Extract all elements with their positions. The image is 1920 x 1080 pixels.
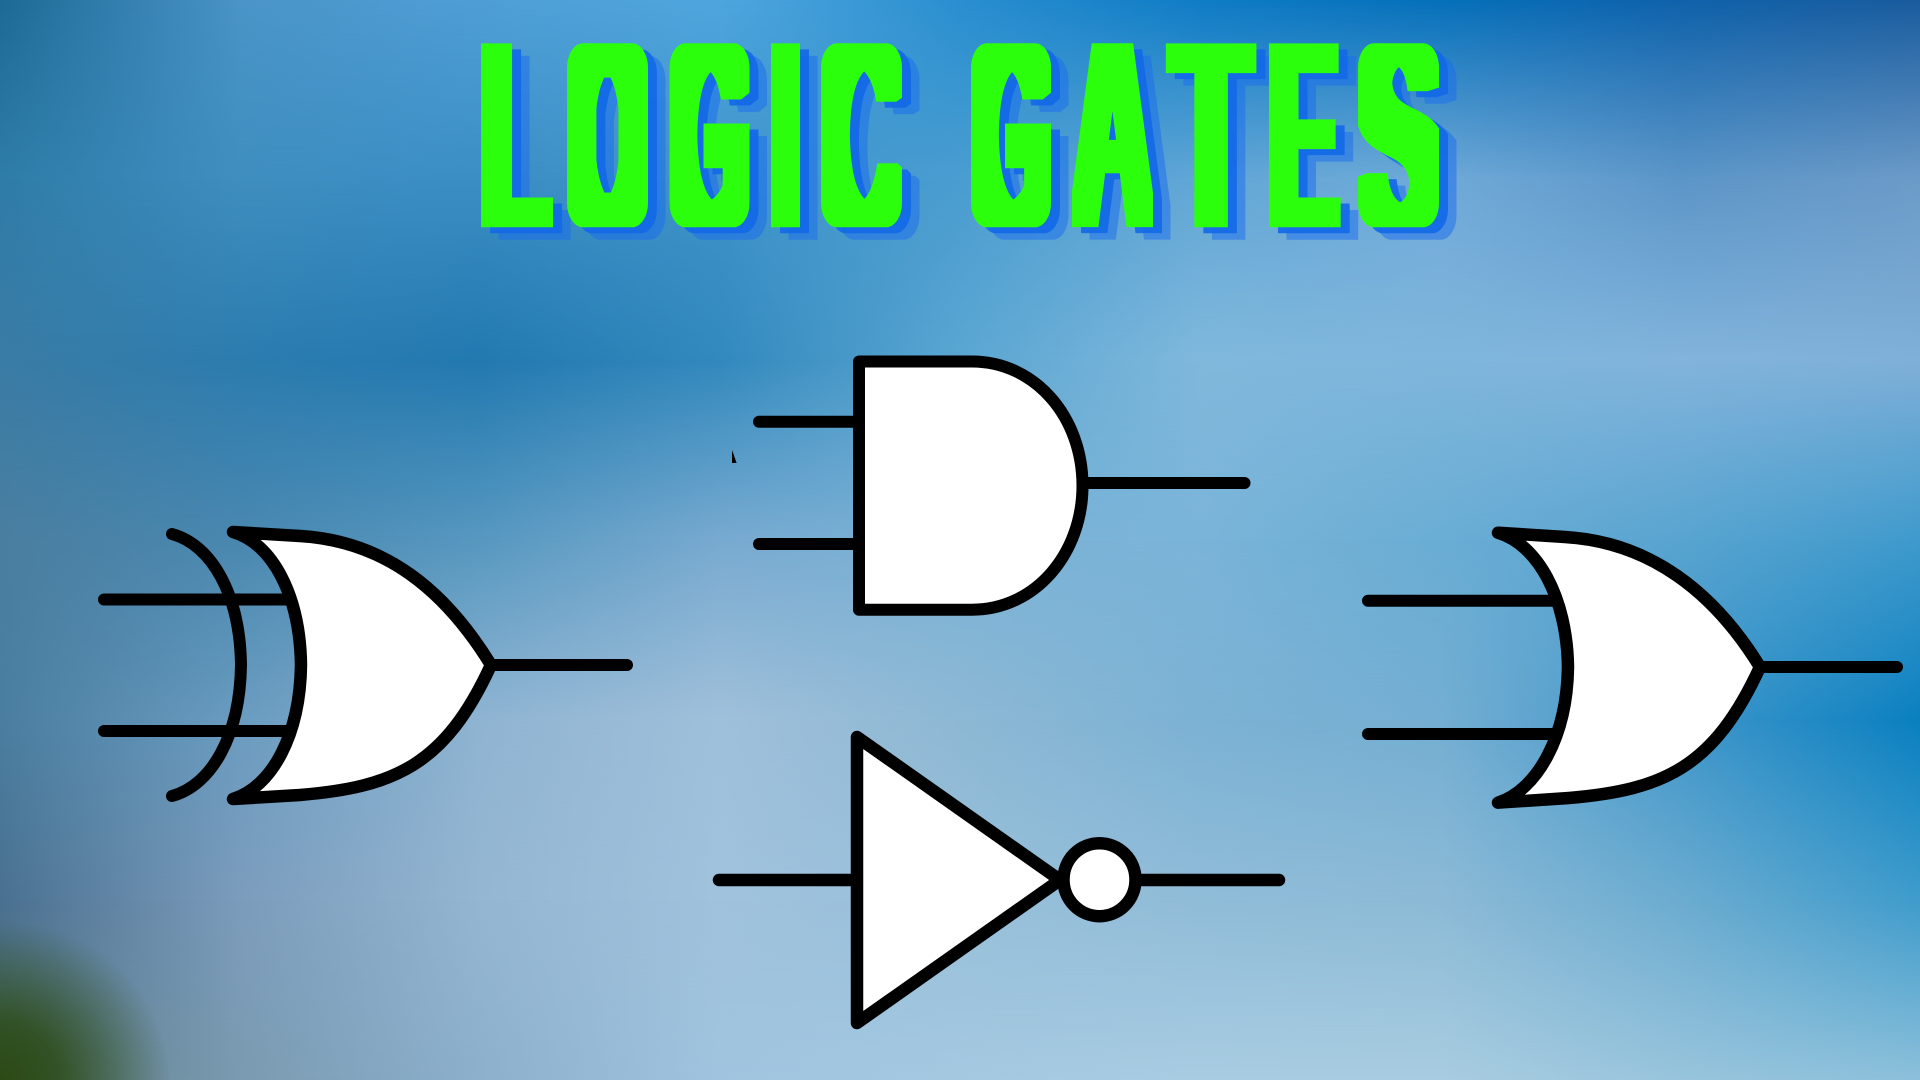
OR body [1498,533,1760,803]
NOT output wire [1142,874,1279,886]
NOT inversion bubble [1064,843,1136,916]
AND body [859,362,1082,610]
XOR extra input arc [172,534,241,796]
XOR input wires [104,600,290,731]
XOR gate [104,532,627,799]
XOR output wire [491,659,627,671]
NOT input wire [719,874,857,886]
stray black mark [732,450,737,463]
XOR body [233,532,491,799]
AND gate [759,362,1244,610]
NOT gate [719,737,1279,1023]
AND input wires [759,422,859,544]
AND output wire [1082,477,1244,489]
NOT triangle body [857,737,1060,1023]
OR gate [1368,533,1897,803]
OR input wires [1368,601,1555,734]
OR output wire [1760,661,1897,673]
title: LOGIC GATES [481,43,1456,240]
